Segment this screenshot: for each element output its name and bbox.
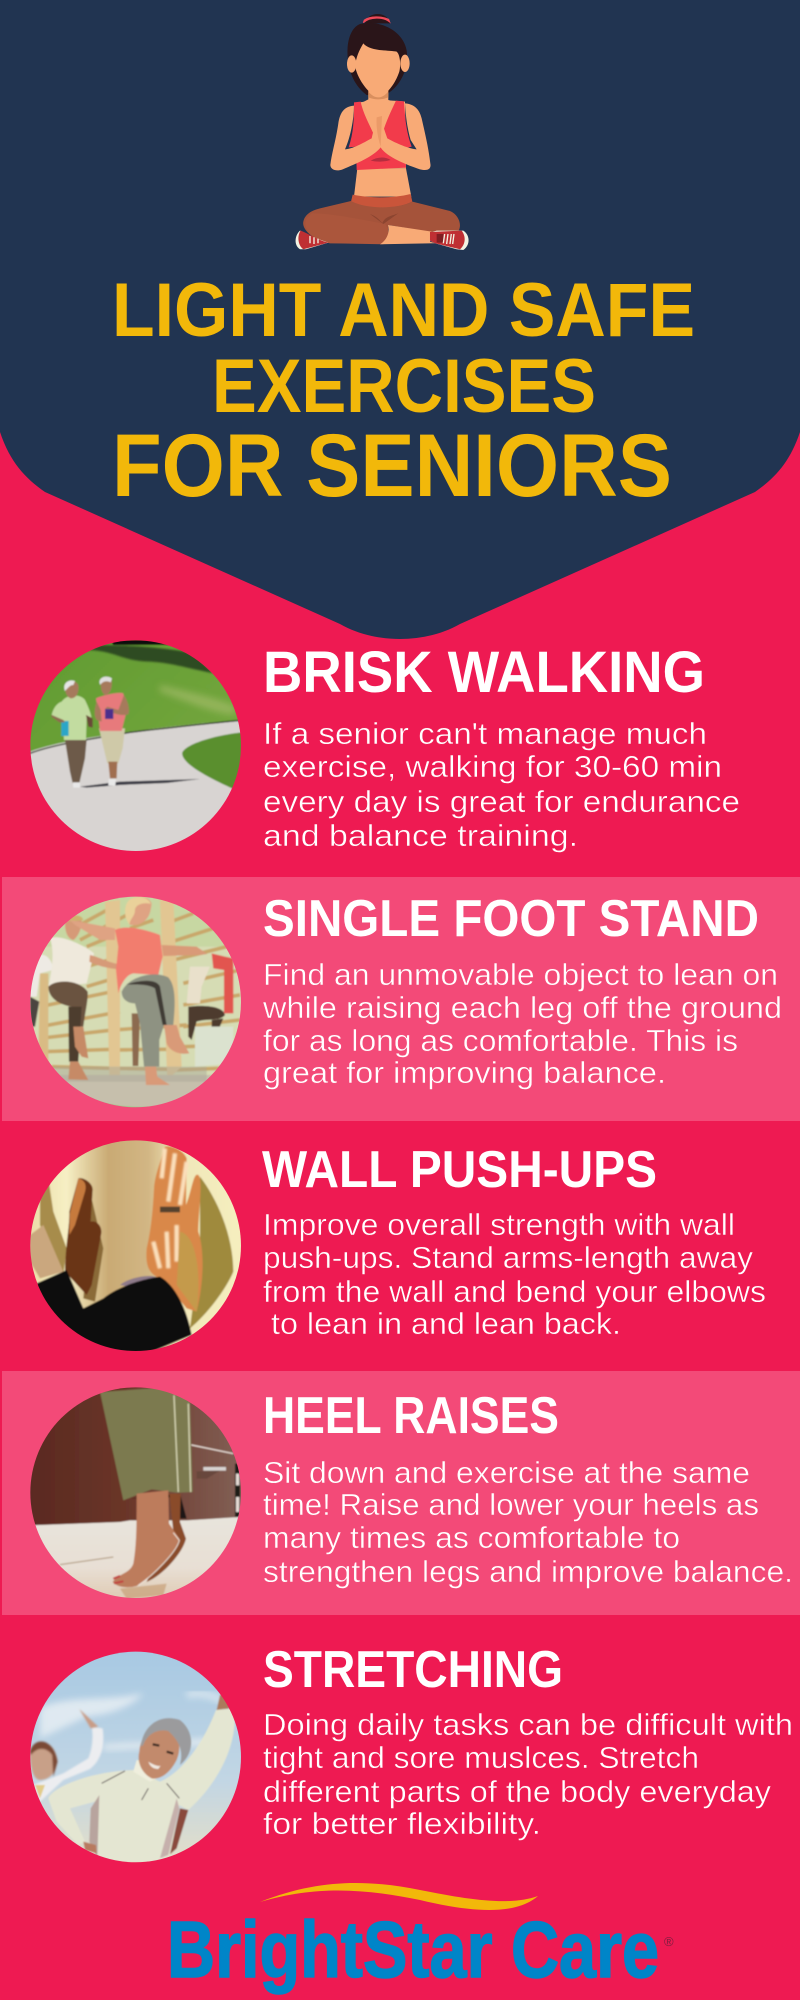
heading and text: brisk walking: every day is great for endurance	[263, 784, 740, 819]
photo: wall push-ups	[30, 1140, 241, 1351]
heading and text: single foot stand: SINGLE FOOT STAND	[263, 890, 759, 948]
heading and text: stretching: STRETCHING	[263, 1641, 563, 1699]
heading and text: brisk walking: BRISK WALKING	[263, 640, 705, 705]
heading and text: heel raises	[263, 1387, 793, 1589]
heading and text: heel raises: many times as comfortable to	[263, 1520, 680, 1555]
heading and text: brisk walking: If a senior can't manage much	[263, 716, 707, 751]
photo: stretching	[30, 1652, 241, 1862]
heading and text: stretching: Doing daily tasks can be difficult with	[263, 1707, 793, 1742]
icon: meditating woman	[296, 14, 469, 250]
heading and text: brisk walking: and balance training.	[263, 818, 578, 853]
title: EXERCISES	[212, 344, 596, 429]
photo: single foot stand	[30, 896, 241, 1108]
panel: single foot stand band	[2, 877, 800, 1121]
heading and text: stretching	[263, 1641, 793, 1841]
heading and text: heel raises: time! Raise and lower your heels as	[263, 1487, 759, 1522]
header panel	[0, 0, 800, 639]
heading and text: single foot stand: great for improving balance.	[263, 1055, 666, 1090]
heading and text: wall push-ups: WALL PUSH-UPS	[262, 1141, 657, 1199]
heading and text: wall push-ups	[262, 1141, 766, 1341]
heading and text: brisk walking: exercise, walking for 30-60 min	[263, 749, 722, 784]
heading and text: wall push-ups: to lean in and lean back.	[271, 1306, 621, 1341]
logo: BrightStar Care: BrightStar Care	[167, 1905, 659, 1994]
heading and text: stretching: tight and sore muslces. Stretch	[263, 1740, 699, 1775]
title	[112, 268, 695, 515]
heading and text: heel raises: HEEL RAISES	[263, 1387, 559, 1445]
title: LIGHT AND SAFE	[112, 268, 695, 353]
heading and text: wall push-ups: from the wall and bend your elbows	[263, 1274, 766, 1309]
heading and text: heel raises: strengthen legs and improve balance.	[263, 1554, 793, 1589]
heading and text: wall push-ups: Improve overall strength with wall	[263, 1207, 735, 1242]
title: FOR SENIORS	[112, 415, 672, 515]
heading and text: brisk walking	[263, 640, 740, 853]
heading and text: single foot stand	[262, 890, 782, 1090]
heading and text: single foot stand: Find an unmovable object to lean on	[263, 957, 778, 992]
heading and text: single foot stand: for as long as comfortable. This is	[263, 1023, 738, 1058]
heading and text: wall push-ups: push-ups. Stand arms-length away	[263, 1240, 753, 1275]
heading and text: stretching: different parts of the body everyday	[263, 1774, 772, 1809]
photo: heel raises	[30, 1387, 241, 1598]
heading and text: single foot stand: while raising each leg off the ground	[262, 990, 782, 1025]
logo: BrightStar Care: ®	[664, 1934, 674, 1949]
heading and text: heel raises: Sit down and exercise at the same	[263, 1455, 750, 1490]
panel: heel raises band	[2, 1371, 800, 1615]
heading and text: stretching: for better flexibility.	[263, 1806, 541, 1841]
photo: brisk walking	[30, 640, 241, 851]
